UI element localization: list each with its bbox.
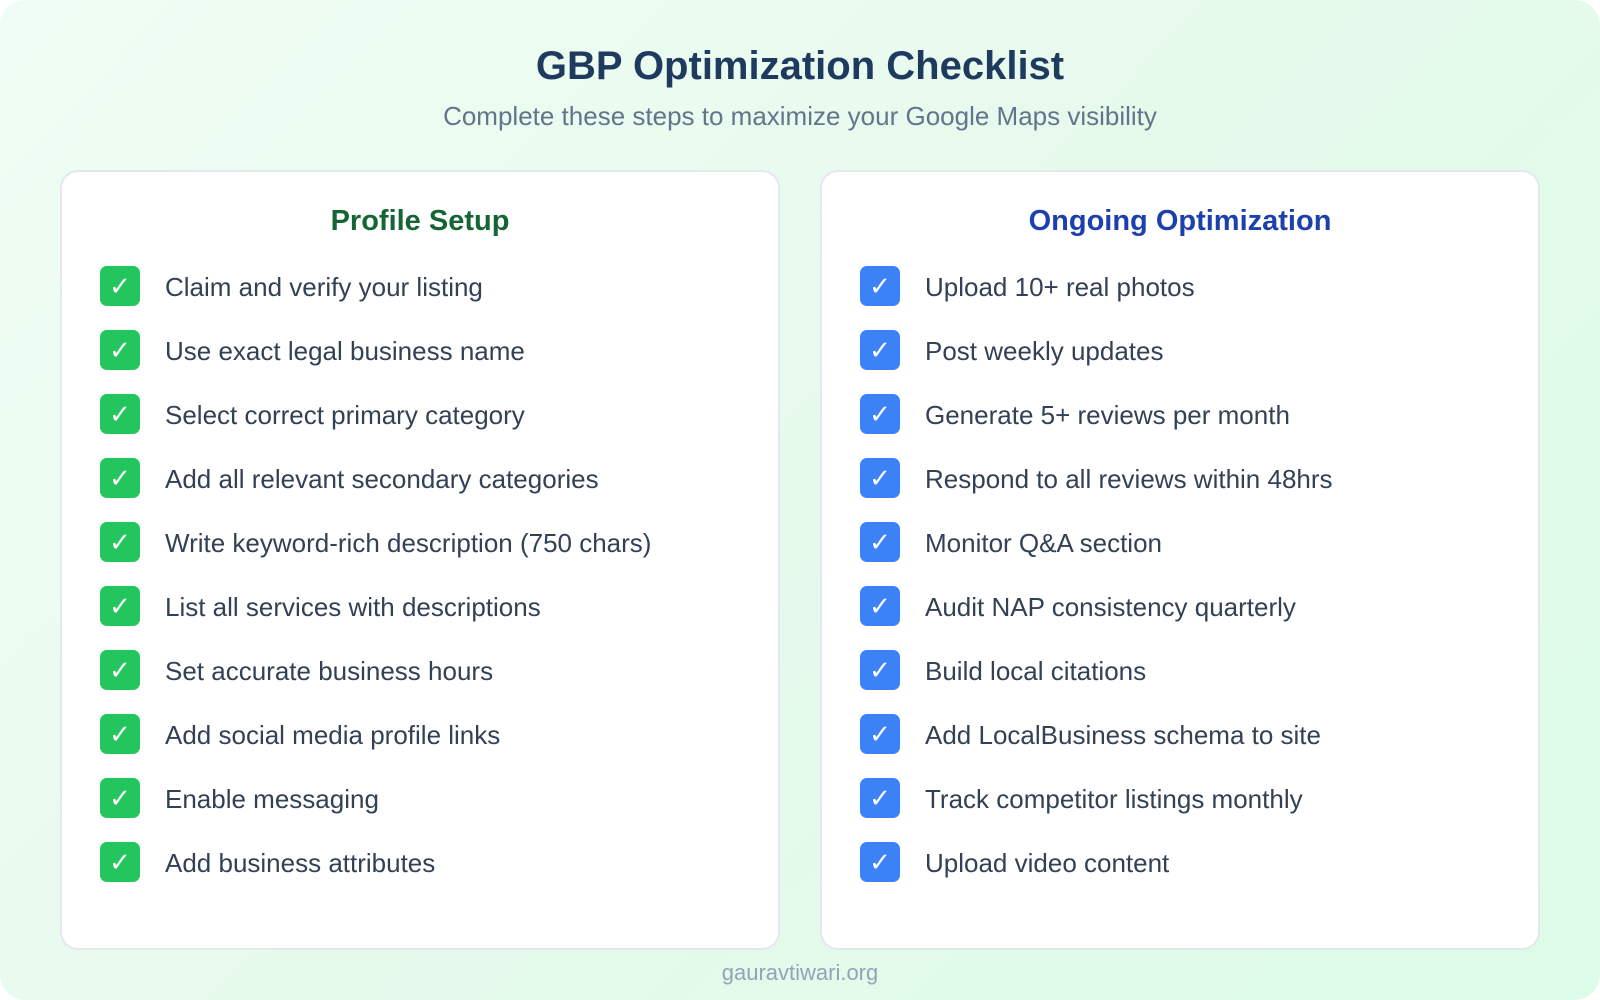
- item 3: [860, 394, 1290, 434]
- item 9: [860, 778, 1303, 818]
- item 3: Generate 5+ reviews per month: [925, 400, 1290, 430]
- item 10: ✓: [109, 847, 131, 877]
- item 8: [100, 714, 500, 754]
- item 6: Audit NAP consistency quarterly: [925, 592, 1296, 622]
- item 9: Enable messaging: [165, 784, 379, 814]
- item 7: [860, 650, 1146, 690]
- item 5: ✓: [869, 527, 891, 557]
- item 7: ✓: [869, 655, 891, 685]
- item 10: Add business attributes: [165, 848, 435, 878]
- item 2: ✓: [109, 335, 131, 365]
- item 2: [860, 330, 1163, 370]
- item 5: [860, 522, 1162, 562]
- panel: profile setup: [60, 170, 780, 950]
- item 2: [100, 330, 525, 370]
- item 3: ✓: [109, 399, 131, 429]
- item 7: [100, 650, 493, 690]
- item 10: ✓: [869, 847, 891, 877]
- item 8: ✓: [109, 719, 131, 749]
- item 1: [860, 266, 1195, 306]
- item 9: ✓: [109, 783, 131, 813]
- item 1: ✓: [109, 271, 131, 301]
- item 4: ✓: [869, 463, 891, 493]
- item 6: ✓: [869, 591, 891, 621]
- item 6: List all services with descriptions: [165, 592, 541, 622]
- item 4: ✓: [109, 463, 131, 493]
- item 1: ✓: [869, 271, 891, 301]
- title: GBP Optimization Checklist: [536, 44, 1064, 88]
- item 9: Track competitor listings monthly: [925, 784, 1303, 814]
- item 8: Add LocalBusiness schema to site: [925, 720, 1321, 750]
- item 9: ✓: [869, 783, 891, 813]
- item 10: Upload video content: [925, 848, 1169, 878]
- item 3: Select correct primary category: [165, 400, 525, 430]
- item 8: Add social media profile links: [165, 720, 500, 750]
- item 2: Use exact legal business name: [165, 336, 525, 366]
- item 5: [100, 522, 651, 562]
- item 5: ✓: [109, 527, 131, 557]
- item 4: [860, 458, 1333, 498]
- item 7: Set accurate business hours: [165, 656, 493, 686]
- item 2: ✓: [869, 335, 891, 365]
- item 2: Post weekly updates: [925, 336, 1163, 366]
- item 5: Monitor Q&A section: [925, 528, 1162, 558]
- item 6: [100, 586, 541, 626]
- item 10: [100, 842, 435, 882]
- item 3: ✓: [869, 399, 891, 429]
- item 4: Respond to all reviews within 48hrs: [925, 464, 1333, 494]
- item 8: ✓: [869, 719, 891, 749]
- item 1: Upload 10+ real photos: [925, 272, 1195, 302]
- item 4: [100, 458, 599, 498]
- item 6: [860, 586, 1296, 626]
- item 1: Claim and verify your listing: [165, 272, 483, 302]
- item 3: [100, 394, 525, 434]
- item 8: [860, 714, 1321, 754]
- heading: ongoing optimization: Ongoing Optimization: [1029, 205, 1331, 237]
- panel: ongoing optimization: [820, 170, 1540, 950]
- item 7: ✓: [109, 655, 131, 685]
- heading: profile setup: Profile Setup: [331, 205, 509, 237]
- item 6: ✓: [109, 591, 131, 621]
- item 9: [100, 778, 379, 818]
- footer: gauravtiwari.org: [722, 960, 878, 985]
- item 4: Add all relevant secondary categories: [165, 464, 599, 494]
- item 1: [100, 266, 483, 306]
- item 5: Write keyword-rich description (750 chars): [165, 528, 651, 558]
- item 10: [860, 842, 1170, 882]
- item 7: Build local citations: [925, 656, 1146, 686]
- subtitle: Complete these steps to maximize your Google Maps visibility: [443, 101, 1157, 131]
